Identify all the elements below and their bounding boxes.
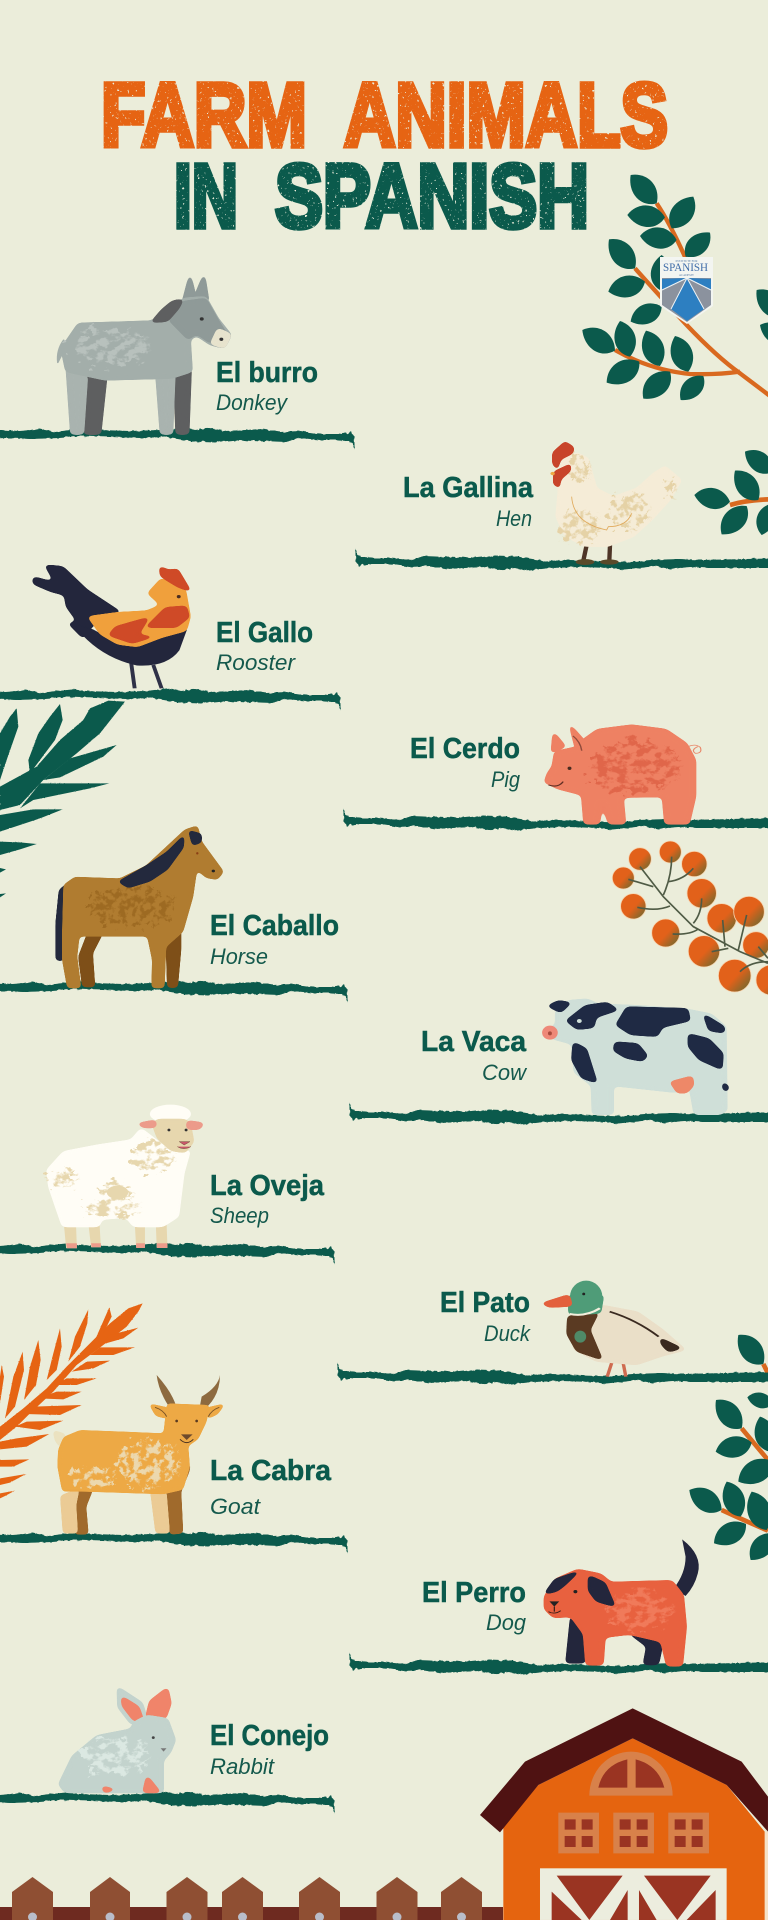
- label: El Gallo: [216, 617, 313, 675]
- label: El Pato: [440, 1287, 531, 1346]
- ground line: gallina: [355, 548, 768, 571]
- branch: lower right: [684, 1328, 768, 1566]
- label: El Cerdo: El Cerdo: [410, 733, 520, 765]
- label: El Gallo: Rooster: [216, 650, 297, 675]
- label: El Caballo: Horse: [210, 944, 268, 969]
- ground line: caballo: [0, 980, 348, 1003]
- animal: cow: [542, 999, 730, 1114]
- animal: rooster: [33, 565, 195, 688]
- label: El Caballo: El Caballo: [210, 910, 339, 942]
- label: El Cerdo: [410, 733, 521, 792]
- title: SPANISH: [275, 147, 589, 247]
- label: La Cabra: La Cabra: [210, 1455, 332, 1487]
- branch: right of hen: [692, 444, 768, 541]
- logo shield: SPANISH: [663, 262, 708, 274]
- label: La Oveja: La Oveja: [210, 1170, 325, 1202]
- title: FARM: [101, 66, 307, 166]
- animal: hen: [546, 442, 682, 565]
- label: El Perro: El Perro: [422, 1577, 526, 1609]
- label: La Vaca: [421, 1026, 528, 1085]
- ground line: cerdo: [343, 808, 768, 831]
- ground line: pato: [337, 1362, 768, 1385]
- label: El Pato: El Pato: [440, 1287, 530, 1319]
- title: ANIMALS: [344, 66, 668, 166]
- title: [101, 66, 668, 247]
- label: El Caballo: [210, 910, 339, 969]
- barn: [480, 1708, 768, 1920]
- ground line: burro: [0, 427, 355, 450]
- label: El Perro: [422, 1577, 527, 1635]
- label: El Perro: Dog: [486, 1610, 527, 1635]
- logo shield: ACADEMY: [679, 273, 695, 277]
- label: El Conejo: [210, 1720, 329, 1779]
- label: La Oveja: [210, 1170, 325, 1228]
- ground line: conejo: [0, 1791, 335, 1814]
- label: La Gallina: Hen: [496, 506, 532, 531]
- label: La Vaca: Cow: [482, 1060, 528, 1085]
- animal: sheep: [47, 1105, 204, 1248]
- ground line: vaca: [349, 1102, 768, 1125]
- ground line: oveja: [0, 1242, 335, 1265]
- animal: rabbit: [59, 1687, 175, 1793]
- title: IN: [174, 147, 238, 247]
- label: El burro: Donkey: [216, 390, 289, 415]
- label: El Conejo: Rabbit: [210, 1754, 275, 1779]
- berry branch: [612, 841, 768, 995]
- animal: dog: [544, 1539, 699, 1666]
- animal: duck: [542, 1281, 686, 1377]
- animal: pig: [545, 723, 701, 824]
- label: El Gallo: El Gallo: [216, 617, 313, 649]
- palm leaf: orange: [0, 1303, 143, 1498]
- label: La Oveja: Sheep: [210, 1203, 269, 1228]
- label: La Cabra: Goat: [210, 1494, 261, 1519]
- animal: horse: [56, 826, 223, 988]
- ground line: gallo: [0, 688, 341, 711]
- label: La Vaca: La Vaca: [421, 1026, 527, 1058]
- label: La Cabra: [210, 1455, 332, 1519]
- logo shield: [660, 257, 713, 324]
- label: El Conejo: El Conejo: [210, 1720, 329, 1752]
- label: La Gallina: La Gallina: [403, 472, 534, 504]
- ground line: perro: [349, 1652, 768, 1675]
- branch: top right leaves: [576, 168, 768, 406]
- logo shield: INSTITUTE FOR: [676, 259, 697, 263]
- palm leaf: green: [0, 701, 125, 897]
- label: El Pato: Duck: [484, 1321, 531, 1346]
- ground line: cabra: [0, 1531, 348, 1554]
- label: La Gallina: [403, 472, 534, 531]
- animal: goat: [53, 1375, 225, 1534]
- animal: donkey: [58, 273, 231, 434]
- fence: [0, 1877, 503, 1920]
- label: El Cerdo: Pig: [491, 767, 521, 792]
- label: El burro: El burro: [216, 357, 318, 389]
- label: El burro: [216, 357, 318, 415]
